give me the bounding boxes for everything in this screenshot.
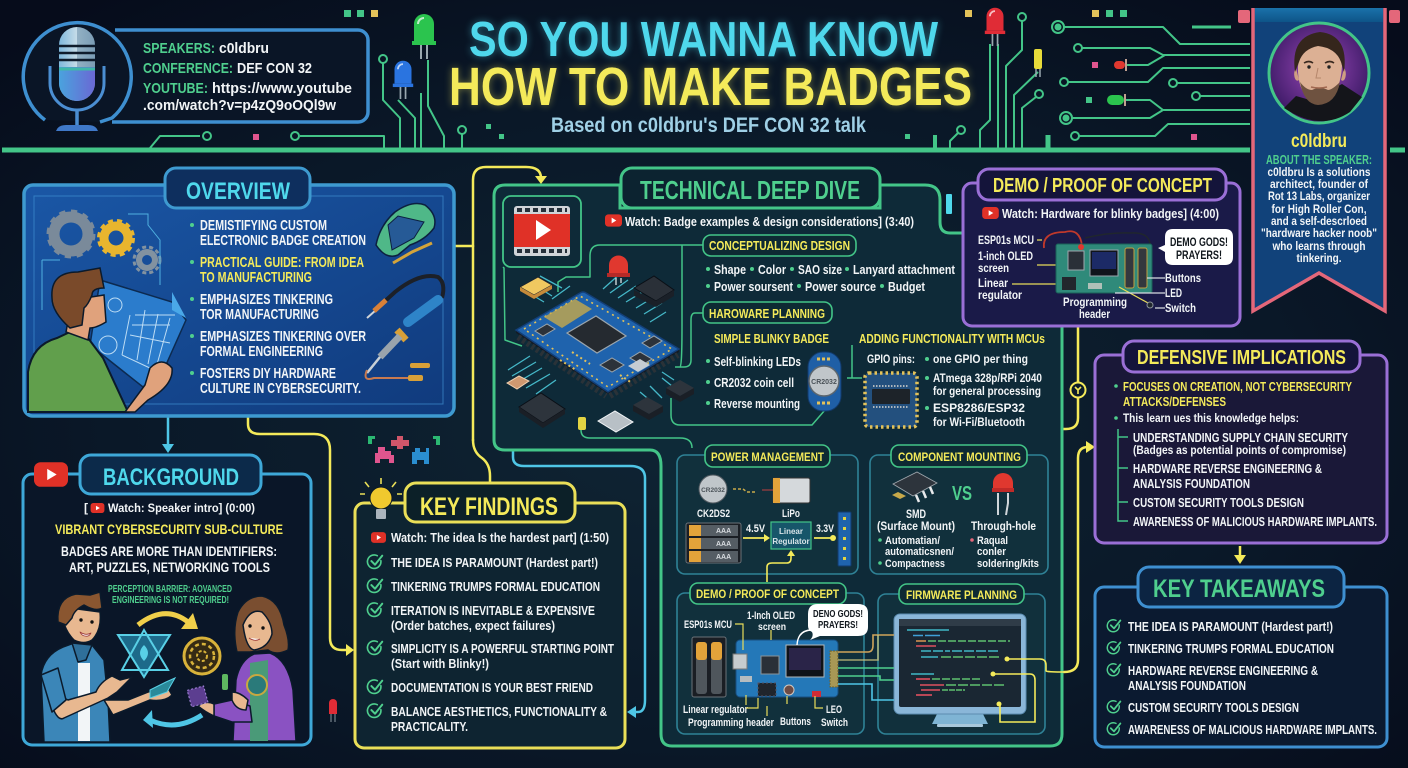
speaker bio: tinkering. [1296, 251, 1342, 265]
bubble: demo gods [797, 604, 868, 645]
heading: technical deep dive: TECHNICAL DEEP DIVE [640, 175, 860, 205]
heading: DEMO / PROOF OF CONCEPT [993, 175, 1212, 197]
text: simple blinky badge: CR2032 coin cell [714, 375, 794, 390]
text: background copy: PERCEPTION BARRIER: AOVANCED [108, 584, 232, 595]
text: adding functionality: for general processing [933, 384, 1041, 398]
icon: blue LED [393, 61, 413, 99]
heading: hardware planning: HAROWARE PLANNING [709, 306, 825, 321]
panel: demo proof of concept (inner) [677, 583, 868, 734]
list: takeaways: CUSTOM SECURITY TOOLS DESIGN [1128, 700, 1299, 715]
heading [1123, 341, 1360, 372]
info box: YOUTUBE: [143, 80, 208, 97]
text: overview bullets: PRACTICAL GUIDE: FROM IDEA [200, 254, 364, 271]
text: SMD: Automatian/ [885, 535, 940, 547]
text: background copy: ENGINEERING IS NOT REQUIRED! [112, 595, 229, 606]
text: background copy: ART, PUZZLES, NETWORKING TOOLS [69, 559, 270, 575]
list: findings: ITERATION IS INEVITABLE & EXPENSIVE [391, 603, 595, 618]
text: simple blinky badge: Reverse mounting [714, 396, 800, 411]
battery holder [692, 637, 726, 697]
illustration: woman with badge [198, 596, 296, 741]
info box: .com/watch?v=p4zQ9oOQl9w [143, 97, 336, 114]
watch link: Watch: Badge examples & design considerations] (3:40) [625, 214, 914, 229]
text: simple blinky badge: SIMPLE BLINKY BADGE [714, 331, 829, 346]
text: background copy: BADGES ARE MORE THAN IDENTIFIERS: [61, 543, 277, 559]
labels: Buttons [780, 716, 811, 728]
icon: green side LED [1107, 94, 1126, 106]
microphone emblem and info box [23, 23, 368, 131]
panel: background [23, 455, 311, 745]
labels right: Programming [1063, 295, 1127, 309]
text: design considerations: Shape [714, 262, 746, 277]
arrow: demo to regulator [767, 550, 795, 582]
coin cell: CR2032 [701, 487, 725, 494]
text: overview bullets: FOSTERS DIY HARDWARE [200, 365, 336, 382]
labels: 1-Inch OLED [747, 610, 795, 622]
bubble: demo gods: DEMO GODS! [1170, 235, 1228, 249]
title: HOW TO MAKE BADGES [449, 57, 972, 117]
icon: red LED [985, 8, 1005, 46]
text: design considerations: Budget [888, 279, 926, 294]
AA battery pack [686, 523, 741, 563]
list: findings: THE IDEA IS PARAMOUNT (Hardest part!) [391, 555, 598, 570]
heading: POWER MANAGEMENT [711, 450, 825, 464]
icon: red side LED [1114, 59, 1127, 71]
heading: conceptualizing design: CONCEPTUALIZING DESIGN [709, 238, 850, 253]
text: SMD [877, 507, 955, 570]
heading: COMPONENT MOUNTING [898, 450, 1021, 464]
heading: FIRMWARE PLANNING [906, 588, 1017, 602]
speaker bio: c0ldbru Is a solutions [1268, 165, 1371, 179]
labels left: regulator [978, 288, 1022, 302]
list: implications tree: (Badges as potential points of compromise) [1133, 443, 1346, 457]
top circuit traces [2, 13, 1405, 150]
text: overview bullets: TO MANUFACTURING [200, 269, 312, 286]
text: through-hole [970, 519, 1039, 570]
labels: screen [758, 622, 786, 633]
text: through-hole: soldering/kits [977, 558, 1039, 570]
watch link: Watch: Speaker intro] (0:00) [108, 501, 255, 515]
labels left: 1-inch OLED [978, 249, 1033, 263]
board illustration traces [503, 245, 862, 448]
labels left: Linear [978, 276, 1008, 290]
text: overview bullets: TOR MANUFACTURING [200, 306, 319, 323]
heading: conceptualizing design [703, 235, 856, 256]
speaker portrait [1269, 23, 1369, 123]
list: findings: TINKERING TRUMPS FORMAL EDUCATION [391, 579, 600, 594]
labels right: header [1079, 307, 1110, 321]
text: adding functionality: ESP8286/ESP32 [933, 401, 1025, 415]
heading [705, 445, 830, 467]
text: through-hole: conler [977, 546, 1007, 558]
list: implications tree: UNDERSTANDING SUPPLY CHAIN SECURITY [1133, 430, 1348, 445]
labels: Programming header [688, 717, 775, 729]
coin cell: CK2DS2 [697, 508, 730, 520]
speaker bio: architect, founder of [1270, 177, 1369, 191]
text: focus points [1114, 379, 1352, 425]
list: takeaways: ANALYSIS FOUNDATION [1128, 678, 1246, 693]
icon: gears [49, 212, 160, 273]
AA battery pack: AAA [716, 554, 731, 561]
text: background copy: VIBRANT CYBERSECURITY SUB-CULTURE [55, 521, 283, 537]
text: design considerations: SAO size [798, 262, 842, 277]
text: overview bullets: DEMISTIFYING CUSTOM [200, 217, 327, 234]
info box: c0ldbru [219, 40, 269, 57]
illustration: exchanged badges [118, 613, 220, 728]
panel: overview [24, 168, 454, 416]
icon: green LED [412, 14, 436, 59]
list: findings [367, 555, 614, 734]
heading: DEFENSIVE IMPLICATIONS [1137, 347, 1346, 369]
list: implications tree: CUSTOM SECURITY TOOLS DESIGN [1133, 495, 1304, 510]
panel: demo proof of concept (top right) [963, 169, 1240, 326]
speaker name: c0ldbru [1291, 131, 1347, 152]
watch link: Watch: The idea Is the hardest part] (1:50) [391, 530, 609, 545]
text: simple blinky badge [706, 331, 829, 411]
icon: lightbulb [360, 478, 402, 519]
text: design considerations: Lanyard attachment [853, 262, 956, 277]
heading: BACKGROUND [103, 464, 239, 491]
icon: microphone [23, 23, 131, 131]
icon: coin cell holder [808, 352, 841, 411]
info box: SPEAKERS: [143, 40, 215, 57]
illustration: prototype board [1044, 231, 1165, 308]
heading [899, 584, 1024, 604]
heading [405, 483, 575, 522]
coin cell [697, 475, 755, 520]
info box: https://www.youtube [212, 80, 352, 97]
icon: through-hole LED [992, 473, 1014, 515]
illustration: engineer with blueprint [28, 214, 186, 412]
text: adding functionality [859, 331, 1045, 429]
text: adding functionality: ADDING FUNCTIONALITY WITH MCUs [859, 331, 1045, 346]
list: findings: (Start with Blinky!) [391, 656, 489, 671]
icon: monitor with code [894, 614, 1026, 727]
illustration: man with badge [41, 592, 172, 742]
panel: firmware planning [838, 584, 1066, 734]
regulator flow: Regulator [772, 537, 810, 546]
text: simple blinky badge: Self-blinking LEDs [714, 354, 801, 369]
panel: technical deep dive [494, 168, 1066, 746]
list: implications tree: ANALYSIS FOUNDATION [1133, 476, 1250, 491]
regulator flow: 3.3V [816, 523, 835, 535]
panel: key takeaways [1095, 567, 1387, 747]
list: implications tree: HARDWARE REVERSE ENGINEERING & [1133, 461, 1322, 476]
labels: ESP01s MCU [684, 619, 732, 631]
labels [683, 610, 848, 729]
heading [690, 583, 846, 604]
labels: Linear regulator [683, 704, 749, 716]
panel: defensive implications [1095, 341, 1387, 543]
icon: badge board [376, 204, 435, 263]
labels: LEO [826, 704, 842, 716]
labels left: screen [978, 261, 1009, 275]
text: design considerations: Color [758, 262, 786, 277]
heading [165, 168, 310, 208]
speaker bio: for High Roller Con, [1272, 202, 1366, 216]
decorative squares [253, 10, 1197, 140]
text: design considerations: Power soursent [714, 279, 794, 294]
board to monitor wires [838, 635, 1066, 722]
panel: component mounting [870, 445, 1048, 574]
icon: SMD chip [892, 472, 937, 502]
LiPo battery [762, 478, 810, 520]
panel: power management [677, 445, 858, 574]
text: overview bullets: EMPHASIZES TINKERING OVER [200, 328, 366, 345]
text: overview bullets: CULTURE IN CYBERSECURITY. [200, 380, 361, 397]
dev board [733, 640, 838, 697]
text: through-hole: Raqual [977, 535, 1008, 547]
watch link: [ [84, 501, 88, 515]
text: SMD: (Surface Mount) [877, 519, 955, 533]
speaker bio: and a self-descrloed [1271, 214, 1367, 228]
list: implications tree [1118, 429, 1377, 529]
info box: DEF CON 32 [237, 60, 312, 77]
text: adding functionality: ATmega 328p/RPi 2040 [933, 371, 1042, 385]
watch link: Watch: Hardware for blinky badges] (4:00) [1002, 206, 1219, 221]
text: adding functionality: one GPIO per thing [933, 352, 1028, 366]
heading: KEY TAKEAWAYS [1153, 575, 1325, 603]
list: findings: SIMPLICITY IS A POWERFUL STARTING POINT [391, 641, 614, 656]
illustration: isometric PCB [507, 256, 694, 432]
speaker bio [1261, 152, 1377, 265]
text: overview bullets: EMPHASIZES TINKERING [200, 291, 333, 308]
text: adding functionality: for Wi-Fi/Bluetooth [933, 415, 1025, 429]
list: takeaways: THE IDEA IS PARAMOUNT (Hardest part!) [1128, 619, 1333, 634]
text: SMD: SMD [906, 507, 926, 521]
regulator flow: Linear [779, 527, 803, 536]
info box: CONFERENCE: [143, 60, 233, 77]
icon: yellow LED [1034, 49, 1042, 77]
heading [978, 169, 1226, 200]
bubble: demo gods: PRAYERS! [1176, 248, 1222, 262]
heading: KEY FINDINGS [420, 493, 558, 521]
text: design considerations [706, 262, 956, 294]
subtitle: Based on c0ldbru's DEF CON 32 talk [551, 114, 866, 137]
title [449, 13, 972, 117]
heading [80, 455, 261, 494]
heading [1138, 567, 1344, 607]
text: overview bullets: FORMAL ENGINEERING [200, 343, 323, 360]
icon: MCU chip [865, 373, 917, 427]
text: adding functionality: GPIO pins: [867, 352, 915, 366]
labels: Switch [821, 717, 848, 729]
list: takeaways: HARDWARE REVERSE ENGINEERING & [1128, 663, 1318, 678]
speaker bio: Rot 13 Labs, organizer [1268, 189, 1370, 203]
text: through-hole: Through-hole [971, 519, 1036, 533]
text: overview bullets [190, 217, 366, 397]
heading: DEMO / PROOF OF CONCEPT [696, 587, 840, 601]
panel: speaker ribbon [1238, 8, 1400, 311]
title: SO YOU WANNA KNOW [469, 13, 939, 67]
icon: space invaders [368, 436, 440, 464]
icon: coin cell holder: CR2032 [811, 379, 837, 386]
text: focus points: This learn ues this knowledge helps: [1123, 411, 1299, 425]
text: overview bullets: ELECTRONIC BADGE CREATION [200, 232, 366, 249]
labels right [1063, 271, 1201, 321]
text: SMD: automaticsnen/ [885, 546, 954, 558]
bubble: demo gods [1158, 229, 1233, 265]
list: findings: BALANCE AESTHETICS, FUNCTIONALITY & [391, 704, 607, 719]
regulator flow: 4.5V [746, 523, 766, 535]
list: findings: (Order batches, expect failures) [391, 618, 555, 633]
heading: technical deep dive [621, 168, 880, 208]
panel: key findings [355, 478, 625, 748]
regulator flow [743, 512, 851, 566]
list: findings: DOCUMENTATION IS YOUR BEST FRIEND [391, 680, 593, 695]
AA battery pack: AAA [716, 528, 731, 535]
heading [891, 445, 1027, 467]
text: focus points: ATTACKS/DEFENSES [1123, 394, 1226, 409]
text: background copy [55, 521, 283, 606]
list: takeaways [1107, 619, 1377, 737]
heading: hardware planning [703, 302, 832, 323]
icon: video film [503, 196, 581, 267]
icon: soldering iron [366, 276, 443, 381]
decorative cyan pin [946, 194, 952, 214]
labels left [978, 233, 1062, 302]
labels right: Switch [1165, 301, 1196, 315]
LiPo battery: LiPo [782, 508, 800, 520]
labels right: LED [1165, 286, 1182, 300]
bubble: demo gods: DENO GODS! [813, 609, 863, 620]
bubble: demo gods: PRAYERS! [818, 620, 858, 631]
text: design considerations: Power source [805, 279, 876, 294]
labels right: Buttons [1165, 271, 1201, 285]
label: VS: VS [952, 483, 972, 505]
labels left: ESP01s MCU [978, 233, 1034, 247]
list: takeaways: TINKERING TRUMPS FORMAL EDUCATION [1128, 641, 1334, 656]
icon: youtube badge [34, 462, 80, 487]
text: SMD: Compactness [885, 558, 945, 570]
heading: OVERVIEW [186, 178, 290, 205]
speaker bio: "hardware hacker noob" [1261, 226, 1377, 240]
AA battery pack: AAA [716, 541, 731, 548]
list: findings: PRACTICALITY. [391, 719, 468, 734]
speaker bio: who learns through [1272, 239, 1366, 253]
info box [112, 30, 368, 122]
connector arrows [162, 167, 1246, 718]
icon: small red LED [329, 699, 337, 722]
